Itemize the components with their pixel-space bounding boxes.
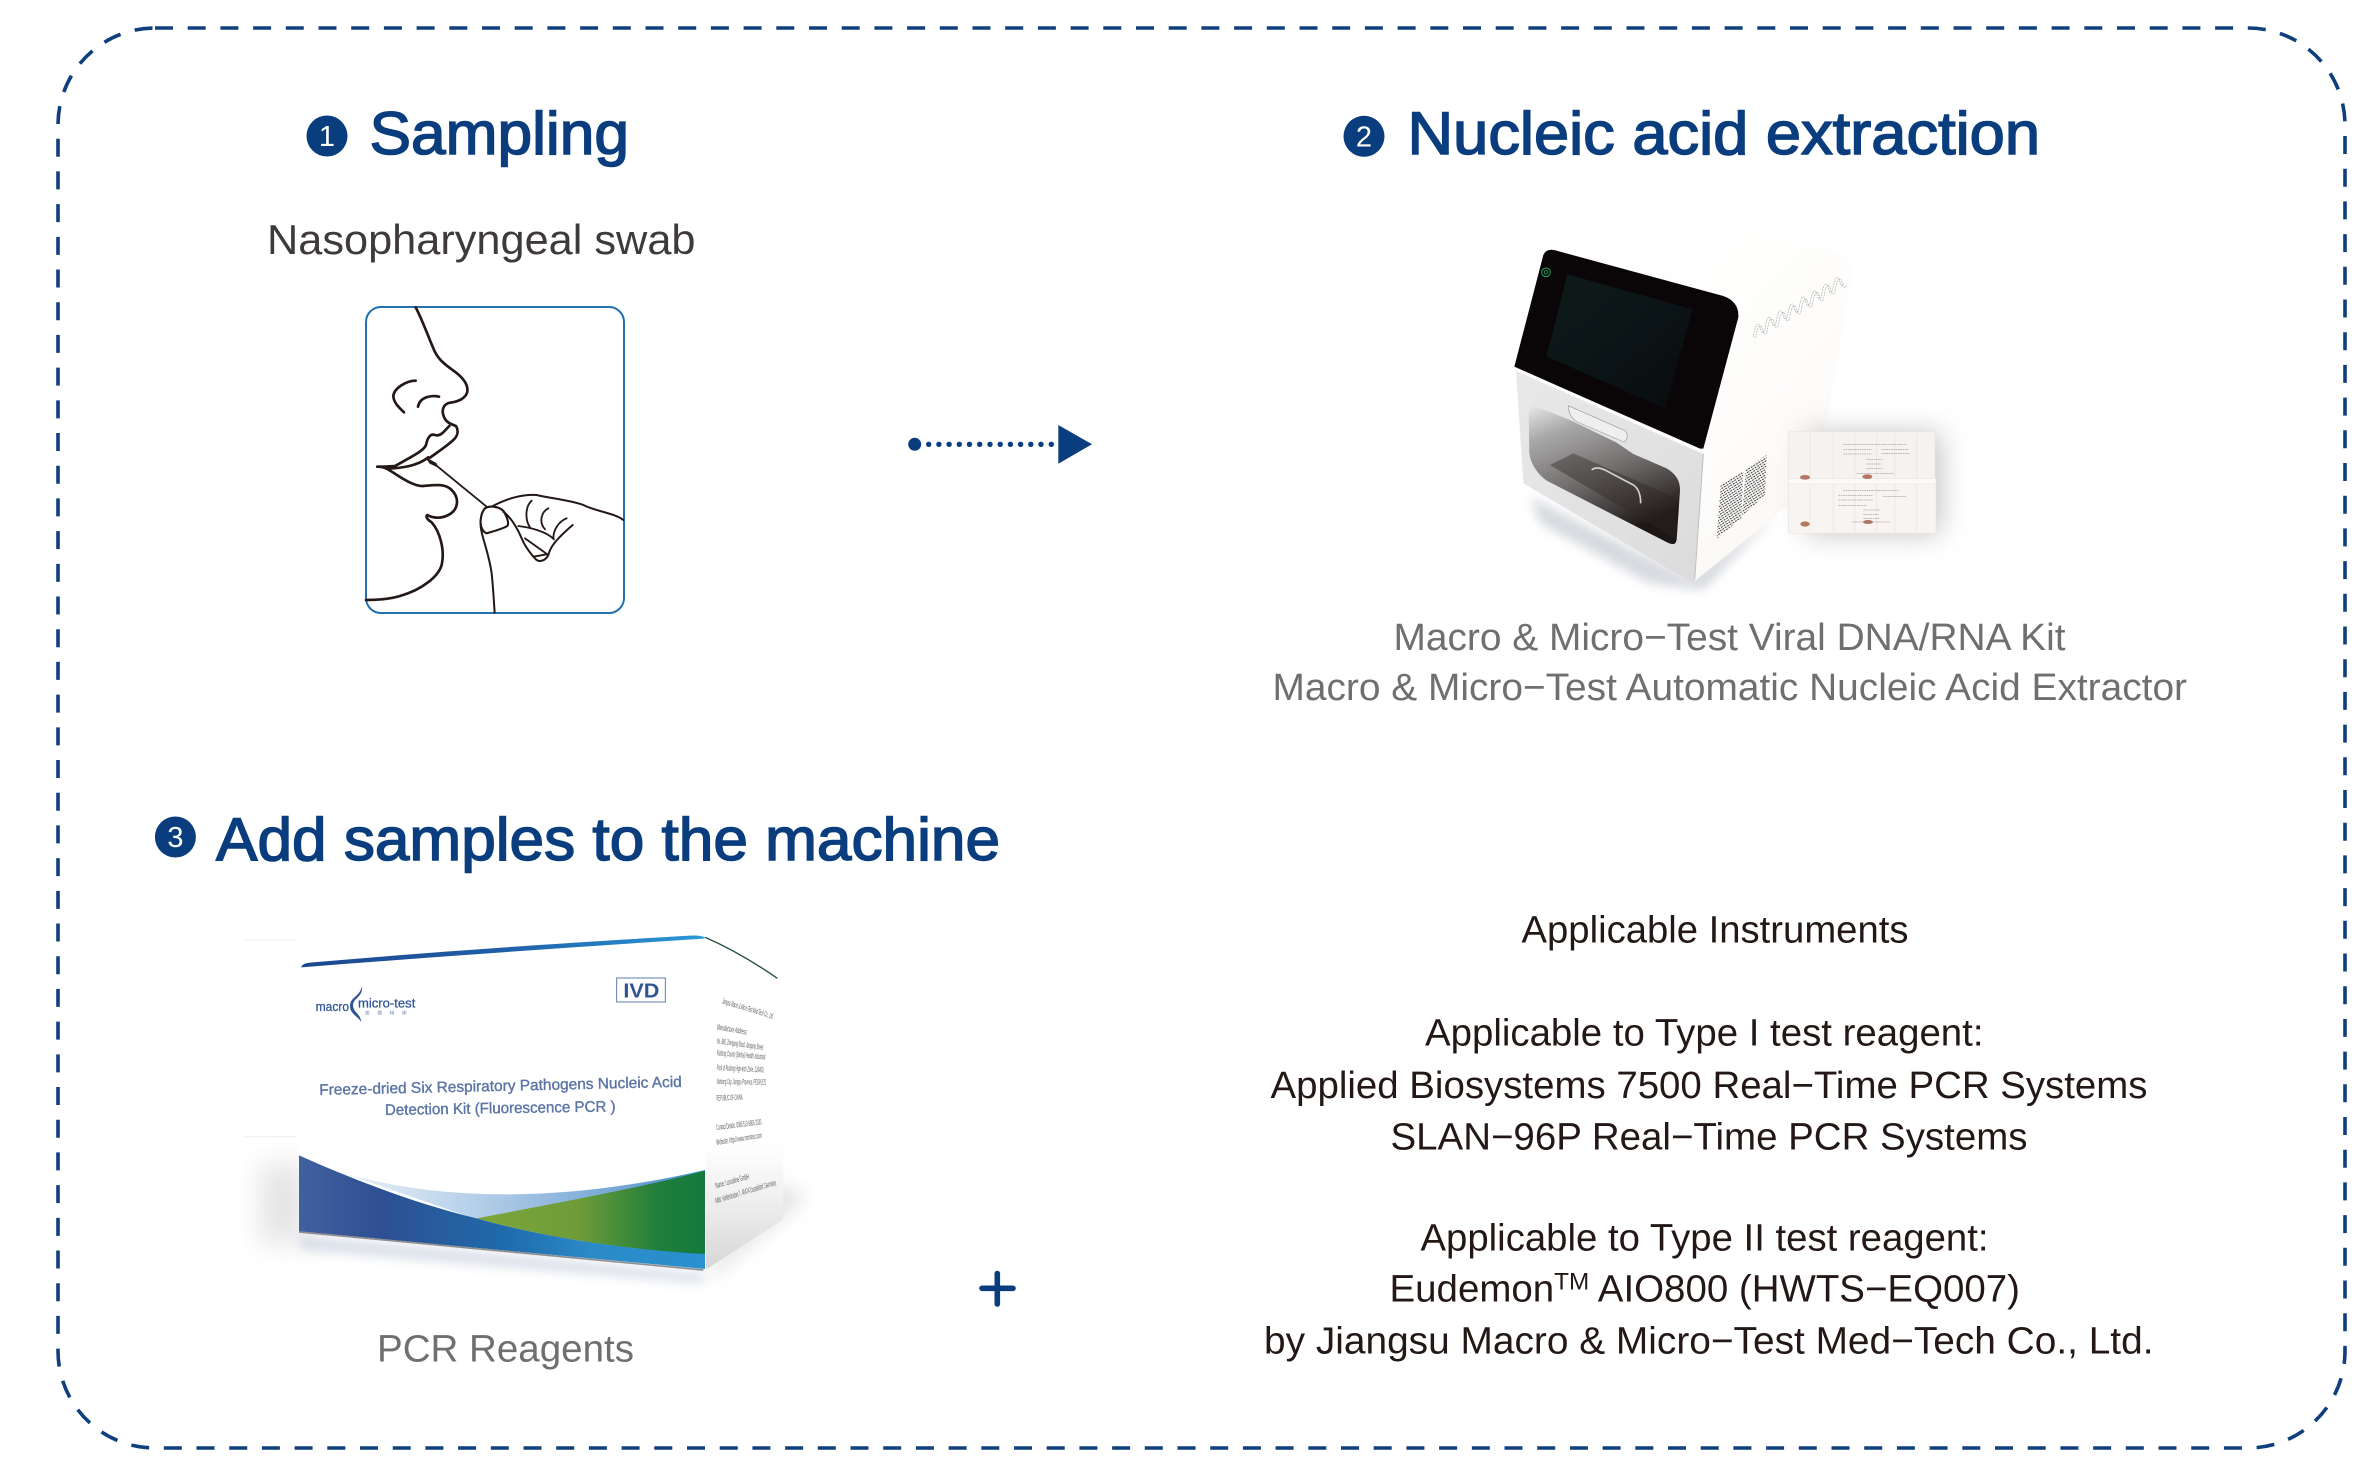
side panel small print: Name: Luxusline GmbH [714,1172,750,1190]
glass door window [1529,407,1680,544]
Type I instruments list: Applicable to Type I test reagent: [1425,1012,1984,1054]
touch screen [1547,274,1692,408]
step number 2 badge: 2 [1356,122,1372,154]
logo [316,986,416,1022]
top colour stripe [301,936,706,967]
side panel small print: REPUBLIC OF CHINA [716,1093,743,1103]
panel: applicable instruments [1264,910,2154,1362]
image: PCR reagent kit box: Jiangsu Macro & Micro-Test Med-Tech Co., Ltd. [721,997,775,1021]
Type I instruments list: Applied Biosystems 7500 Real−Time PCR Systems [1270,1065,2148,1107]
power indicator [1542,268,1550,277]
IVD mark: IVD [623,980,659,1003]
logo: 宏 微 特 体 [365,1010,407,1017]
caption: Macro & Micro-Test kit and extractor [1272,617,2187,709]
bottom wave: light swoosh [330,1169,705,1220]
step number 2 badge [1344,116,1384,157]
image: viral DNA/RNA kit trays [1788,432,1940,533]
bottom wave: green [477,1171,705,1255]
caption: Macro & Micro-Test kit and extractor: Macro & Micro−Test Automatic Nucleic Acid Extractor [1272,667,2187,709]
image: PCR reagent kit box: Addr: Kieferstrasse 7, 40474 Dusseldorf, Germany [714,1178,777,1205]
logo: micro-test [358,996,416,1011]
plus sign [982,1274,1013,1304]
image: PCR reagent kit box: Contact Details: 0086 513-6806 2030 [716,1118,762,1132]
side panel small print [714,997,777,1205]
panel: sampling [267,100,696,613]
image: PCR reagent kit box: Park of Rudong High-tech Zone, 226400, [717,1063,764,1074]
image: automatic nucleic acid extractor [1514,220,1852,590]
caption: Macro & Micro-Test kit and extractor: Macro & Micro−Test Viral DNA/RNA Kit [1394,617,2066,659]
front face [299,939,706,1270]
DNA helix emblem [1753,277,1846,338]
logo: macro [316,999,349,1014]
title: Applicable Instruments: Applicable Instruments [1522,910,1908,952]
step number 1 badge: 1 [319,121,335,153]
Type II instruments list [1264,1218,2154,1362]
product name on the box: Detection Kit (Fluorescence PCR ) [385,1098,616,1119]
heading: Sampling: Sampling [370,100,629,167]
side face [706,939,783,1269]
side panel small print: Website: http://www.mmtest.com [716,1131,763,1147]
soft shadow [260,1163,307,1243]
Type I instruments list: SLAN−96P Real−Time PCR Systems [1390,1116,2028,1158]
step number 3 badge [155,816,196,858]
image: PCR reagent kit box [243,936,807,1283]
subtitle: Nasopharyngeal swab: Nasopharyngeal swab [267,216,696,263]
image: PCR reagent kit box: Nantong City, Jiangsu Province, PEOPLE'S [717,1077,766,1087]
Type II instruments list: TM [1554,1268,1589,1295]
heading: Nucleic acid extraction: Nucleic acid extraction [1408,100,2040,167]
product name on the box: Freeze-dried Six Respiratory Pathogens Nucleic Acid [319,1074,682,1099]
panel: add samples to the machine [155,806,1000,1370]
image: PCR reagent kit box: Rudong County (Binhai) Health Industrial [716,1048,766,1062]
illustration: nasopharyngeal swab on face profile [366,307,624,613]
Type II instruments list: Eudemon [1390,1268,1552,1310]
panel: nucleic acid extraction [1272,100,2187,709]
step number 1 badge [306,116,348,156]
Type II instruments list: Applicable to Type II test reagent: [1420,1218,1988,1260]
step number 3 badge: 3 [167,822,183,854]
caption: PCR Reagents: PCR Reagents [377,1328,634,1370]
arrow: sampling to extraction [908,425,1092,464]
Type I instruments list [1270,1012,2148,1158]
image: PCR reagent kit box: No. 888, Zhengang Road, Jiangang Street, [716,1036,765,1052]
IVD mark [617,978,665,1003]
Type II instruments list: AIO800 (HWTS−EQ007) [1589,1268,2020,1310]
heading: Add samples to the machine: Add samples to the machine [216,806,1000,873]
side vent [1717,471,1743,539]
bottom wave: blue [299,1155,705,1269]
Type II instruments list: by Jiangsu Macro & Micro−Test Med−Tech Co., Ltd. [1264,1320,2154,1362]
door handle recess [1568,406,1627,442]
product name on the box [319,1074,682,1119]
side panel small print: Manufacture Address: [716,1022,748,1037]
